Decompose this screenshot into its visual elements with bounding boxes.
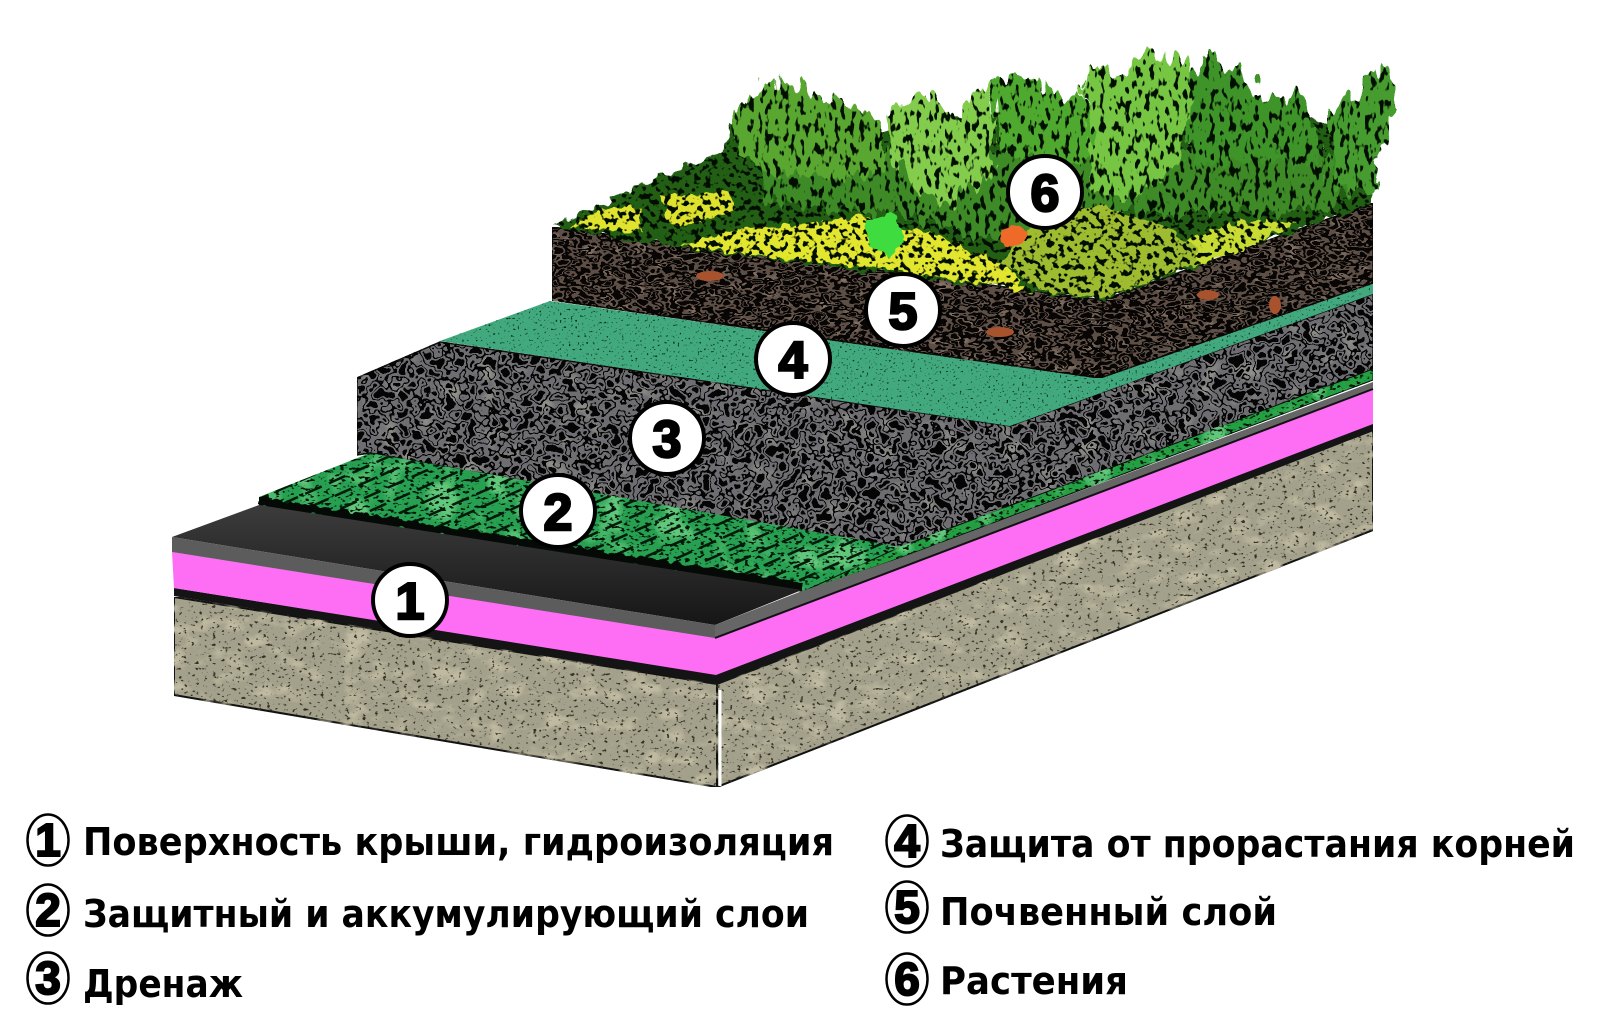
legend item 6: [886, 953, 1128, 1005]
marker 6: 6: [1031, 165, 1059, 223]
legend item 1: Поверхность крыши, гидроизоляция: [83, 820, 834, 864]
layered roof diagram: [172, 50, 1396, 787]
protective accumulation grid: [259, 369, 1373, 592]
marker 5: [866, 274, 940, 346]
legend item 5: 5: [894, 881, 920, 933]
legend item 6: 6: [894, 953, 920, 1005]
legend item 3: Дренаж: [83, 962, 243, 1006]
mid green undergrowth: [760, 150, 1372, 240]
bright yellow tufts at right: [1190, 220, 1297, 265]
legend item 5: Почвенный слой: [940, 890, 1277, 934]
plants: [552, 50, 1396, 300]
shrub right: [1190, 53, 1326, 165]
marker 4: [756, 323, 830, 395]
orange flower: [1000, 225, 1028, 247]
insulation: black separator line and pink band: [172, 389, 1373, 684]
yellow band: [680, 216, 1030, 292]
marker 1: 1: [396, 573, 424, 631]
bush middle: [887, 82, 995, 205]
legend item 3: 3: [35, 952, 61, 1004]
bush centre: [990, 73, 1092, 165]
soil layer: [552, 203, 1373, 378]
marker 4: 4: [779, 332, 808, 390]
marker 1: [373, 564, 447, 636]
waterproofing membrane: [172, 382, 1373, 638]
legend item 2: Защитный и аккумулирующий слои: [83, 892, 809, 936]
legend item 3: [28, 952, 243, 1006]
bright green patch: [864, 212, 905, 258]
lower yellow green tufts: [1000, 205, 1233, 298]
legend item 6: Растения: [940, 959, 1128, 1003]
gravel drainage layer: [357, 294, 1373, 549]
shrub far right: [1330, 68, 1396, 190]
legend: [28, 814, 1575, 1006]
marker 2: [521, 475, 595, 547]
bush left: [733, 82, 885, 178]
legend item 2: 2: [35, 884, 61, 936]
concrete roof base: [174, 430, 1373, 787]
legend item 4: 4: [894, 815, 920, 867]
marker 3: 3: [653, 411, 681, 469]
marker 2: 2: [544, 484, 572, 542]
legend item 5: [886, 881, 1277, 934]
marker 6: [1008, 156, 1082, 228]
ground cover, dark green mass: [552, 100, 1378, 300]
root barrier mat: [440, 283, 1373, 426]
marker 5: 5: [889, 283, 917, 341]
yellow ground flowers left: [570, 206, 640, 232]
legend item 1: 1: [35, 814, 61, 866]
tall shrub: [1084, 50, 1194, 200]
yellow ground tufts: [664, 190, 735, 225]
marker 3: [630, 402, 704, 474]
